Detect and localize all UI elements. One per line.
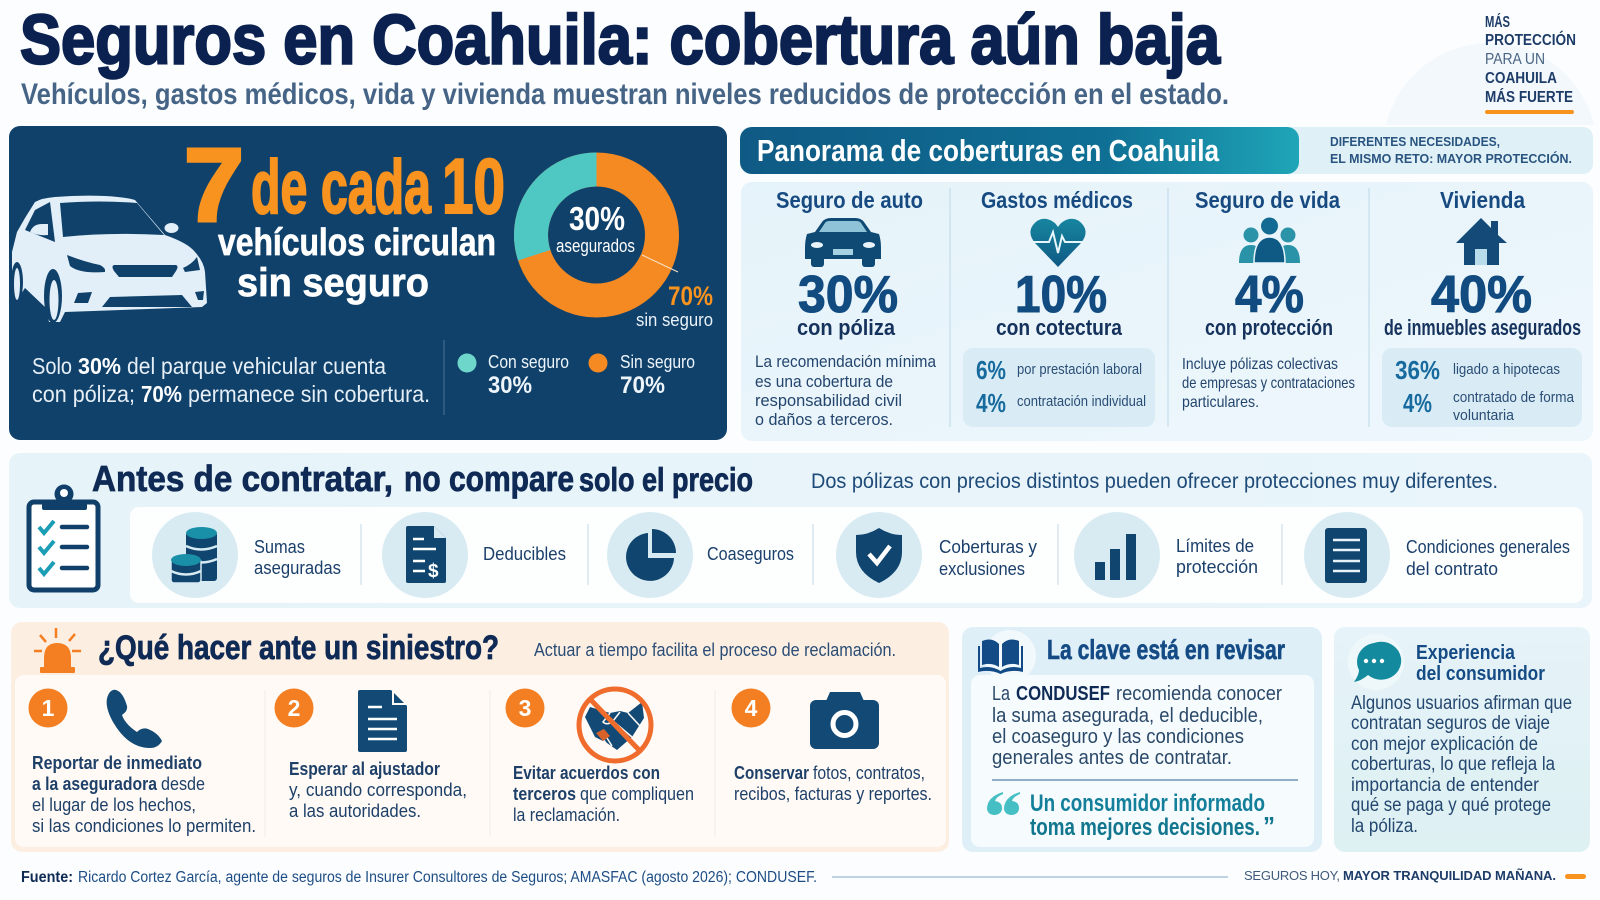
panel: experiencia del consumidor bbox=[1334, 627, 1590, 852]
header bbox=[20, 11, 1576, 114]
item: coberturas y exclusiones: exclusiones bbox=[939, 559, 1025, 579]
card: vivienda: contratado de forma bbox=[1453, 389, 1575, 406]
heading: Antes de contratar, bbox=[92, 458, 393, 499]
step 1: 1 bbox=[42, 695, 55, 721]
card: vivienda: 4% bbox=[1403, 388, 1432, 418]
card: vivienda: 40% bbox=[1431, 266, 1532, 324]
card: vivienda: voluntaria bbox=[1453, 407, 1515, 424]
step 4: fotos, contratos, bbox=[813, 763, 925, 783]
headline stat: 7 bbox=[184, 128, 244, 244]
donut chart: sin seguro bbox=[636, 310, 713, 330]
summary text: con póliza; bbox=[32, 381, 135, 407]
body text: coberturas, lo que refleja la bbox=[1351, 754, 1555, 775]
step 2: y, cuando corresponda, bbox=[289, 780, 467, 800]
body text: el coaseguro y las condiciones bbox=[992, 725, 1244, 748]
slogan bbox=[1485, 14, 1576, 114]
summary text: 30% bbox=[78, 353, 121, 379]
step 1: a la aseguradora bbox=[32, 774, 158, 794]
body text: Algunos usuarios afirman que bbox=[1351, 693, 1572, 714]
icon: chat bubble bbox=[1354, 642, 1401, 682]
item: condiciones generales bbox=[1304, 512, 1570, 598]
tagline: MAYOR TRANQUILIDAD MAÑANA. bbox=[1343, 868, 1556, 883]
step 3: Evitar acuerdos con bbox=[513, 763, 660, 783]
summary text: Solo bbox=[32, 353, 72, 379]
card: seguro de vida: Seguro de vida bbox=[1195, 187, 1340, 213]
card: gastos médicos: contratación individual bbox=[1017, 393, 1146, 410]
item: limites de proteccion: Límites de bbox=[1176, 536, 1254, 556]
step 4: 4 bbox=[745, 695, 758, 721]
body text: qué se paga y qué protege bbox=[1351, 795, 1551, 816]
heading: no compare bbox=[404, 458, 574, 499]
card: seguro de auto: La recomendación mínima bbox=[755, 352, 936, 371]
icon: car bbox=[805, 218, 881, 267]
heading bbox=[92, 458, 753, 499]
tagline: SEGUROS HOY, bbox=[1244, 868, 1340, 883]
card: seguro de auto: Seguro de auto bbox=[776, 187, 923, 213]
banner: EL MISMO RETO: MAYOR PROTECCIÓN. bbox=[1330, 151, 1572, 166]
card: seguro de auto: responsabilidad civil bbox=[755, 391, 902, 410]
donut chart: 30% bbox=[569, 200, 625, 237]
heading: del consumidor bbox=[1416, 663, 1545, 685]
item: sumas aseguradas: Sumas bbox=[254, 537, 305, 557]
icon: clipboard bbox=[29, 484, 98, 590]
slogan: PARA UN bbox=[1485, 51, 1545, 68]
item: limites de proteccion bbox=[1074, 512, 1258, 598]
body text: la suma asegurada, el deducible, bbox=[992, 704, 1263, 727]
pull quote: toma mejores decisiones. bbox=[1030, 814, 1260, 841]
subheading: Actuar a tiempo facilita el proceso de reclamación. bbox=[534, 640, 896, 660]
card: vivienda: 36% bbox=[1395, 355, 1440, 385]
step 4: Conservar bbox=[734, 763, 809, 783]
source: Fuente: bbox=[21, 869, 73, 886]
headline text bbox=[218, 222, 496, 305]
donut chart bbox=[531, 170, 713, 330]
item: deducibles bbox=[382, 512, 566, 598]
step 1: si las condiciones lo permiten. bbox=[32, 816, 256, 836]
headline text: vehículos circulan bbox=[218, 222, 496, 264]
legend: 70% bbox=[620, 372, 665, 399]
pull quote bbox=[987, 790, 1275, 841]
item: coberturas y exclusiones bbox=[836, 512, 1037, 598]
body text bbox=[992, 682, 1282, 769]
card: gastos médicos: Gastos médicos bbox=[981, 187, 1133, 213]
legend: 30% bbox=[488, 372, 532, 399]
body text: importancia de entender bbox=[1351, 775, 1540, 796]
card: seguro de auto bbox=[755, 187, 936, 429]
panel: panorama de coberturas bbox=[740, 127, 1593, 441]
body text: recomienda conocer bbox=[1116, 682, 1282, 705]
item: coaseguros: Coaseguros bbox=[707, 544, 794, 564]
card: seguro de vida: 4% bbox=[1235, 266, 1304, 324]
card: seguro de vida: con protección bbox=[1205, 315, 1333, 340]
slogan: PROTECCIÓN bbox=[1485, 31, 1576, 49]
item: deducibles: Deducibles bbox=[483, 544, 566, 564]
card: gastos médicos bbox=[963, 187, 1155, 427]
item: condiciones generales: del contrato bbox=[1406, 559, 1498, 579]
card: vivienda bbox=[1382, 187, 1582, 427]
summary text: 70% bbox=[141, 381, 182, 407]
step 3: que compliquen bbox=[580, 784, 694, 804]
pull quote: ” bbox=[1263, 811, 1275, 841]
panel: antes de contratar bbox=[9, 453, 1592, 608]
card: vivienda: ligado a hipotecas bbox=[1453, 361, 1560, 378]
item: condiciones generales: Condiciones generales bbox=[1406, 537, 1570, 557]
step 1: el lugar de los hechos, bbox=[32, 795, 196, 815]
body text: la póliza. bbox=[1351, 816, 1418, 837]
body text bbox=[1351, 693, 1572, 837]
card: vivienda: Vivienda bbox=[1440, 187, 1525, 213]
card: seguro de vida: Incluye pólizas colectivas bbox=[1182, 356, 1338, 373]
card: gastos médicos: 6% bbox=[976, 355, 1006, 385]
step 2: a las autoridades. bbox=[289, 801, 421, 821]
panel: 7 de cada 10 bbox=[9, 126, 727, 440]
item: limites de proteccion: protección bbox=[1176, 557, 1258, 577]
step 3 bbox=[506, 688, 694, 825]
step 3: terceros bbox=[513, 784, 576, 804]
icon: people bbox=[1239, 218, 1300, 263]
headline text: sin seguro bbox=[237, 261, 429, 305]
donut chart: asegurados bbox=[556, 236, 635, 256]
legend: Con seguro bbox=[488, 352, 569, 372]
headline stat: 10 bbox=[442, 142, 505, 230]
step 2: Esperar al ajustador bbox=[289, 759, 440, 779]
summary text: permanece sin cobertura. bbox=[188, 381, 430, 407]
step 2: 2 bbox=[288, 695, 300, 721]
body text: CONDUSEF bbox=[1016, 682, 1110, 705]
icon: heart bbox=[1030, 219, 1086, 267]
slogan: MÁS bbox=[1485, 14, 1510, 31]
slogan: COAHUILA bbox=[1485, 70, 1557, 87]
headline stat: de cada bbox=[251, 145, 431, 230]
body text: contratan seguros de viaje bbox=[1351, 713, 1550, 734]
item: deducibles: $ bbox=[428, 561, 439, 582]
step 4 bbox=[732, 688, 932, 804]
banner bbox=[740, 127, 1593, 174]
item: sumas aseguradas: aseguradas bbox=[254, 558, 341, 578]
heading: Experiencia bbox=[1416, 642, 1516, 664]
icon: camera bbox=[810, 692, 879, 749]
card: gastos médicos: con cotectura bbox=[996, 315, 1123, 340]
step 3: la reclamación. bbox=[513, 805, 620, 825]
step 1: desde bbox=[161, 774, 205, 794]
card: seguro de vida bbox=[1182, 187, 1355, 411]
subheading: Dos pólizas con precios distintos pueden ofrecer protecciones muy diferentes. bbox=[811, 470, 1498, 493]
legend: Sin seguro bbox=[620, 352, 695, 372]
banner: Panorama de coberturas en Coahuila bbox=[757, 133, 1220, 168]
source: Ricardo Cortez García, agente de seguros de Insurer Consultores de Seguros; AMASFAC (agosto 2026); CONDUSEF. bbox=[78, 869, 817, 886]
legend bbox=[458, 352, 695, 399]
step 2 bbox=[274, 688, 467, 821]
card: seguro de auto: es una cobertura de bbox=[755, 372, 893, 391]
step 1 bbox=[28, 688, 256, 836]
body text: generales antes de contratar. bbox=[992, 746, 1232, 769]
icon: document bbox=[358, 690, 407, 752]
slogan: MÁS FUERTE bbox=[1485, 89, 1573, 106]
footer bbox=[21, 868, 1586, 886]
summary text: del parque vehicular cuenta bbox=[127, 353, 386, 379]
card: gastos médicos: 10% bbox=[1015, 266, 1107, 324]
donut chart: 70% bbox=[668, 281, 713, 311]
title: Seguros en Coahuila: cobertura aún baja bbox=[20, 0, 1221, 78]
card: seguro de auto: o daños a terceros. bbox=[755, 410, 893, 429]
card: seguro de vida: de empresas y contrataciones bbox=[1182, 375, 1355, 392]
tagline bbox=[1244, 868, 1556, 883]
step 3: 3 bbox=[519, 695, 531, 721]
card: seguro de vida: particulares. bbox=[1182, 394, 1259, 411]
headline stat bbox=[184, 128, 505, 244]
heading: ¿Qué hacer ante un siniestro? bbox=[98, 629, 499, 667]
panel: la clave esta en revisar bbox=[962, 627, 1322, 852]
step 1: Reportar de inmediato bbox=[32, 753, 202, 773]
card: seguro de auto: 30% bbox=[798, 266, 898, 324]
subtitle: Vehículos, gastos médicos, vida y vivienda muestran niveles reducidos de protección en el estado. bbox=[21, 78, 1229, 111]
body text: con mejor explicación de bbox=[1351, 734, 1538, 755]
panel: que hacer ante un siniestro bbox=[11, 622, 949, 852]
icon: phone bbox=[107, 690, 162, 748]
summary text bbox=[32, 353, 430, 407]
item: coberturas y exclusiones: Coberturas y bbox=[939, 537, 1037, 557]
item: coaseguros bbox=[607, 512, 794, 598]
card: gastos médicos: por prestación laboral bbox=[1017, 361, 1142, 378]
banner: DIFERENTES NECESIDADES, bbox=[1330, 134, 1500, 149]
icon: no handshake bbox=[579, 689, 651, 761]
heading: solo el precio bbox=[579, 461, 753, 498]
heading: La clave está en revisar bbox=[1047, 634, 1285, 665]
icon: book bbox=[978, 640, 1023, 674]
body text: La bbox=[992, 682, 1010, 705]
card: seguro de auto: con póliza bbox=[797, 315, 896, 340]
pull quote: Un consumidor informado bbox=[1030, 790, 1265, 817]
icon: siren bbox=[34, 628, 81, 673]
item: sumas aseguradas bbox=[152, 512, 341, 598]
card: gastos médicos: 4% bbox=[976, 388, 1006, 418]
step 4: recibos, facturas y reportes. bbox=[734, 784, 932, 804]
heading bbox=[1416, 642, 1545, 685]
icon: house bbox=[1456, 218, 1507, 265]
icon: white car bbox=[11, 196, 207, 323]
